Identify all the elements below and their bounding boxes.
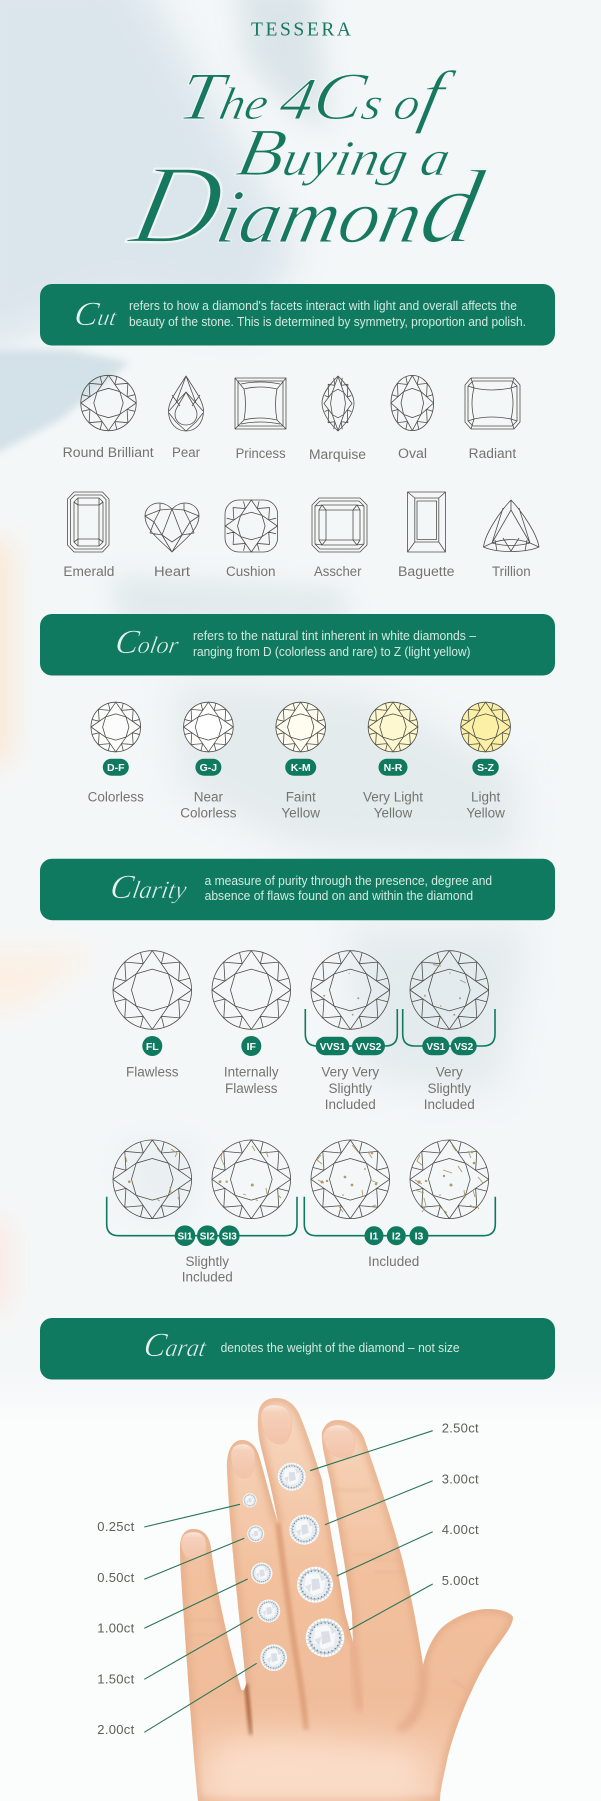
panel: cut banner: beauty of the stone. This is determined by symmetry, proportion and polish. [129,315,526,329]
panel: clarity banner: Clarity [108,868,191,906]
grade I [304,1140,495,1269]
panel: clarity grades bottom row [107,1140,495,1285]
icon: emerald [68,492,109,552]
grade S-Z light yellow: Light [471,790,500,805]
panel: clarity grades top row [113,951,495,1112]
grade SI: SI3 [222,1232,237,1242]
icon: radiant [465,378,520,429]
label: Cushion: Cushion [226,564,276,579]
grade SI: SI1 [177,1232,193,1242]
panel: color banner: Color [113,623,183,661]
label: Asscher: Asscher [314,564,362,579]
grade VS: VS1 [426,1042,446,1053]
grade SI [107,1140,297,1285]
carat labels: 0.25ct [97,1519,135,1534]
icon: cushion [225,500,278,552]
grade K-M faint yellow: K-M [291,762,311,774]
icon: round brilliant [81,375,136,431]
grade G-J near colorless: G-J [200,762,217,774]
grade VVS: Included [325,1097,376,1112]
grade IF internally flawless: Flawless [225,1081,278,1096]
label: Emerald: Emerald [63,564,114,579]
icon: oval [391,375,434,431]
panel: cut banner [40,284,555,346]
icon: princess [235,378,286,429]
panel: cut shapes [63,375,539,579]
grade I: I1 [370,1230,379,1242]
grade G-J near colorless: Colorless [180,806,237,821]
grade SI: SI2 [200,1232,215,1242]
grade VS: Slightly [428,1081,471,1096]
label: Baguette: Baguette [398,564,454,579]
grade FL flawless [113,951,192,1080]
grade K-M faint yellow [276,702,326,821]
icon: heart [145,503,199,552]
grade S-Z light yellow: Yellow [466,806,505,821]
grade K-M faint yellow: Faint [286,790,316,805]
panel: clarity banner: a measure of purity through the presence, degree and [205,874,492,888]
grade VS: Included [424,1097,475,1112]
panel: carat banner: Carat [141,1326,211,1364]
grade SI: Included [182,1270,233,1285]
carat labels: 1.50ct [97,1672,135,1687]
panel: color grades [88,702,510,821]
label: Round Brilliant: Round Brilliant [63,445,154,460]
carat labels: 3.00ct [442,1471,479,1486]
panel: clarity banner [40,859,555,920]
grade IF internally flawless: IF [247,1041,257,1053]
grade G-J near colorless: Near [194,790,224,805]
carat labels: 0.50ct [97,1570,135,1585]
label: Heart: Heart [154,564,190,579]
label: Oval: Oval [398,446,427,461]
leader lines [144,1431,433,1732]
label: Pear: Pear [172,445,200,460]
hand [180,1398,513,1801]
fingernails [181,1405,355,1561]
grade D-F colorless: D-F [107,762,125,774]
grade IF internally flawless: Internally [224,1065,279,1080]
grade VS: VS2 [454,1042,474,1053]
panel: color banner [40,614,555,676]
icon: trillion [484,500,539,552]
title: Diamond [120,143,494,267]
panel: color banner: refers to the natural tint inherent in white diamonds – [193,629,476,643]
grade D-F colorless [88,702,144,805]
carat labels: 2.50ct [442,1420,479,1435]
panel: carat banner [40,1318,555,1380]
grade G-J near colorless [180,702,237,821]
grade D-F colorless: Colorless [88,790,144,805]
carat labels: 1.00ct [97,1621,135,1636]
carat labels: 2.00ct [97,1722,135,1737]
title [124,70,486,244]
panel: cut banner: refers to how a diamond's facets interact with light and overall affects the [129,299,517,313]
carat labels: 5.00ct [442,1573,479,1588]
grade I: I2 [392,1230,401,1242]
grade N-R very light yellow: Very Light [363,790,423,805]
grade S-Z light yellow: S-Z [477,762,495,774]
title: Buying a [231,115,459,190]
carat labels: 4.00ct [442,1522,479,1537]
logo: TESSERA: TESSERA [251,20,351,40]
panel: clarity banner: absence of flaws found on and within the diamond [205,889,473,903]
icon: asscher [312,498,367,552]
label: Princess: Princess [236,446,286,461]
panel: carat banner: denotes the weight of the diamond – not size [221,1341,460,1355]
grade VS: Very [436,1065,463,1080]
icon: baguette [408,492,446,552]
grade S-Z light yellow [461,702,510,821]
grade VVS: VVS1 [320,1042,346,1053]
grade IF internally flawless [212,951,291,1096]
carat stones [243,1463,344,1671]
grade VVS [305,951,397,1112]
grade SI: Slightly [186,1254,229,1269]
grade K-M faint yellow: Yellow [281,806,320,821]
grade VVS: Very Very [321,1065,379,1080]
label: Trillion: Trillion [492,564,531,579]
grade FL flawless: FL [146,1041,159,1053]
icon: marquise [322,376,354,431]
panel: cut banner: Cut [72,295,121,333]
grade FL flawless: Flawless [126,1065,179,1080]
grade VVS: Slightly [329,1081,372,1096]
grade N-R very light yellow: Yellow [374,806,413,821]
grade I: Included [368,1254,419,1269]
carat labels [97,1420,479,1737]
illustration: hand with diamonds [97,1398,513,1801]
title: The 4Cs of [173,58,460,135]
panel: color banner: ranging from D (colorless and rare) to Z (light yellow) [193,645,470,659]
grade I: I3 [415,1230,424,1242]
grade N-R very light yellow: N-R [384,762,403,774]
icon: pear [168,376,204,431]
label: Radiant: Radiant [469,446,516,461]
grade N-R very light yellow [363,702,423,821]
grade VS [403,951,495,1112]
label: Marquise: Marquise [309,447,366,462]
grade VVS: VVS2 [356,1042,382,1053]
